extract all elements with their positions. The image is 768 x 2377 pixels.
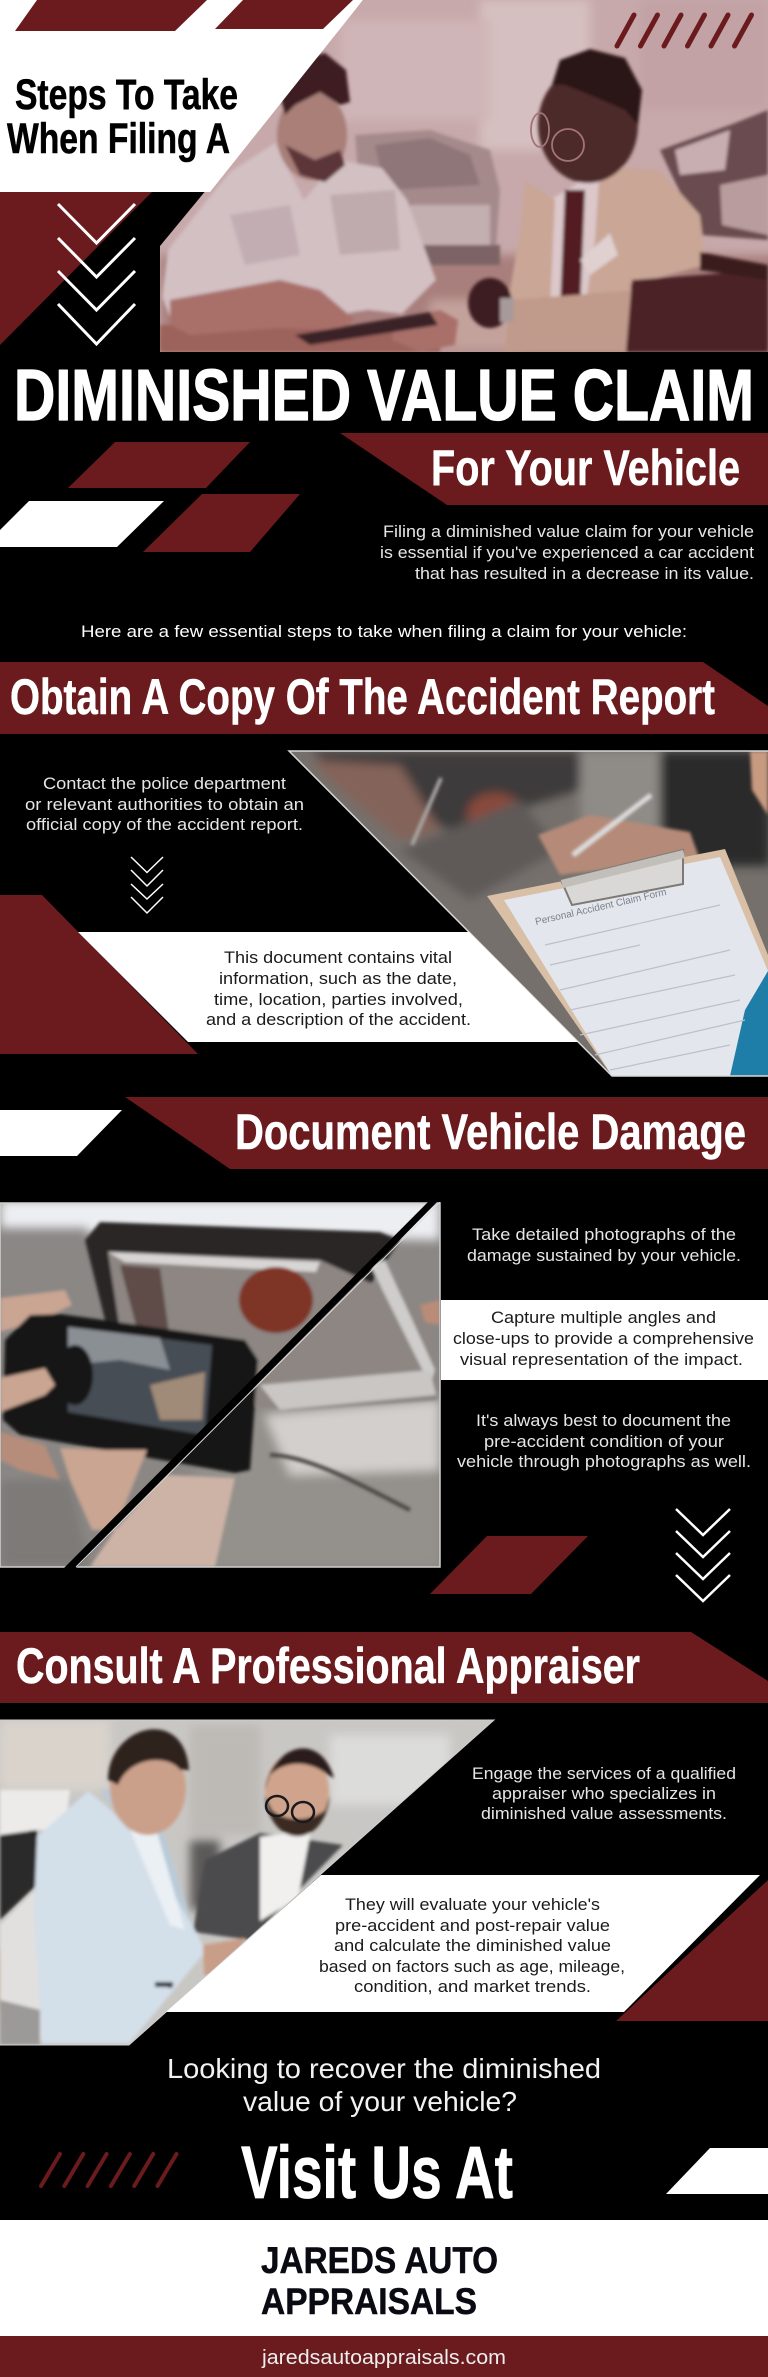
white callout: step 3: based on factors such as age, mileage, xyxy=(319,1958,625,1976)
step 1 text xyxy=(25,775,304,834)
intro paragraph: is essential if you've experienced a car accident xyxy=(380,544,754,562)
decorative slashes top right xyxy=(617,15,752,46)
photo frame xyxy=(0,1203,440,1567)
intro paragraph: that has resulted in a decrease in its value. xyxy=(415,565,754,583)
white callout: step 3: pre-accident and post-repair value xyxy=(335,1917,610,1935)
logo panel: JAREDS AUTO xyxy=(261,2240,498,2281)
white callout: step 2: Capture multiple angles and xyxy=(491,1309,716,1327)
top parallelogram accent 1 xyxy=(15,0,207,31)
step 2 text bottom: vehicle through photographs as well. xyxy=(457,1453,751,1471)
intro paragraph: Filing a diminished value claim for your vehicle xyxy=(383,523,754,541)
icon: large chevrons down xyxy=(58,204,135,344)
photo edge strokes xyxy=(0,1720,494,2045)
step 3 text top: diminished value assessments. xyxy=(481,1805,727,1823)
step 2 text bottom: It's always best to document the xyxy=(476,1412,731,1430)
white callout: step 3: and calculate the diminished value xyxy=(334,1937,611,1955)
icon: small chevrons down xyxy=(131,857,163,913)
white callout: step 1: This document contains vital xyxy=(224,949,452,967)
white callout: step 1: and a description of the accident. xyxy=(206,1011,471,1029)
red parallelogram accent xyxy=(430,1536,588,1594)
step 1 text: or relevant authorities to obtain an xyxy=(25,796,304,814)
step 2 text top: damage sustained by your vehicle. xyxy=(467,1247,741,1265)
white callout: step 3: condition, and market trends. xyxy=(354,1978,591,1996)
step 3 text top: Engage the services of a qualified xyxy=(472,1765,736,1783)
white callout: step 1: time, location, parties involved, xyxy=(214,991,463,1009)
step 3 text top: appraiser who specializes in xyxy=(492,1785,716,1803)
step 2 text bottom xyxy=(457,1412,751,1471)
logo panel xyxy=(0,2220,768,2336)
step 2 text bottom: pre-accident condition of your xyxy=(484,1433,725,1451)
title line: Steps To Take When Filing A: Steps To Take xyxy=(15,71,238,119)
step 2 text top: Take detailed photographs of the xyxy=(472,1226,736,1244)
call to action question xyxy=(167,2053,601,2117)
white title panel xyxy=(0,0,363,192)
dark red corner shape xyxy=(0,192,152,345)
photo: accident claim form on clipboard xyxy=(289,751,768,1076)
white callout: step 2: visual representation of the impact. xyxy=(460,1351,743,1369)
step 1 text: Contact the police department xyxy=(43,775,286,793)
footer band with website: jaredsautoappraisals.com xyxy=(261,2347,506,2369)
logo panel: APPRAISALS xyxy=(261,2281,477,2322)
step 2 text top xyxy=(467,1226,741,1265)
white callout: step 3 xyxy=(166,1875,760,2012)
dark red left shape xyxy=(0,895,198,1054)
hero photo: two men reviewing a tablet at a dealership xyxy=(160,0,768,355)
photo: accident claim form on clipboard: Personal Accident Claim Form xyxy=(534,887,668,928)
photo border strokes xyxy=(289,751,768,1076)
call to action question: value of your vehicle? xyxy=(243,2086,517,2117)
title line: Steps To Take When Filing A xyxy=(7,71,238,163)
photo: two appraisers xyxy=(0,1720,494,2045)
dark red right shape xyxy=(616,1880,768,2021)
photo: phone photographing damaged headlight xyxy=(0,1200,440,1567)
top parallelogram accent 2 xyxy=(215,0,353,29)
white parallelogram accent xyxy=(0,1110,122,1156)
call to action question: Looking to recover the diminished xyxy=(167,2053,601,2084)
heading band: step 2 xyxy=(125,1097,768,1169)
white callout: step 2: close-ups to provide a comprehensive xyxy=(453,1330,754,1348)
title line: Steps To Take When Filing A: When Filing A xyxy=(7,115,230,163)
white callout: step 3: They will evaluate your vehicle's xyxy=(345,1896,600,1914)
diagonal slash across photo xyxy=(64,1197,444,1568)
white callout: step 1 xyxy=(78,932,578,1042)
step 3 text top xyxy=(472,1765,736,1823)
parallelogram accents xyxy=(0,442,300,552)
step 1 text: official copy of the accident report. xyxy=(26,816,303,834)
icon: chevrons down right xyxy=(676,1509,730,1601)
decorative slashes xyxy=(41,2154,176,2186)
footer band with website xyxy=(0,2336,768,2377)
intro paragraph xyxy=(380,523,754,583)
lead-in sentence: Here are a few essential steps to take when filing a claim for your vehicle: xyxy=(81,623,687,641)
white callout: step 2 xyxy=(441,1300,768,1380)
white parallelogram accent xyxy=(666,2148,768,2194)
call to action heading: Visit Us At xyxy=(241,2131,513,2214)
white callout: step 1: information, such as the date, xyxy=(219,970,457,988)
subtitle band xyxy=(340,433,768,505)
